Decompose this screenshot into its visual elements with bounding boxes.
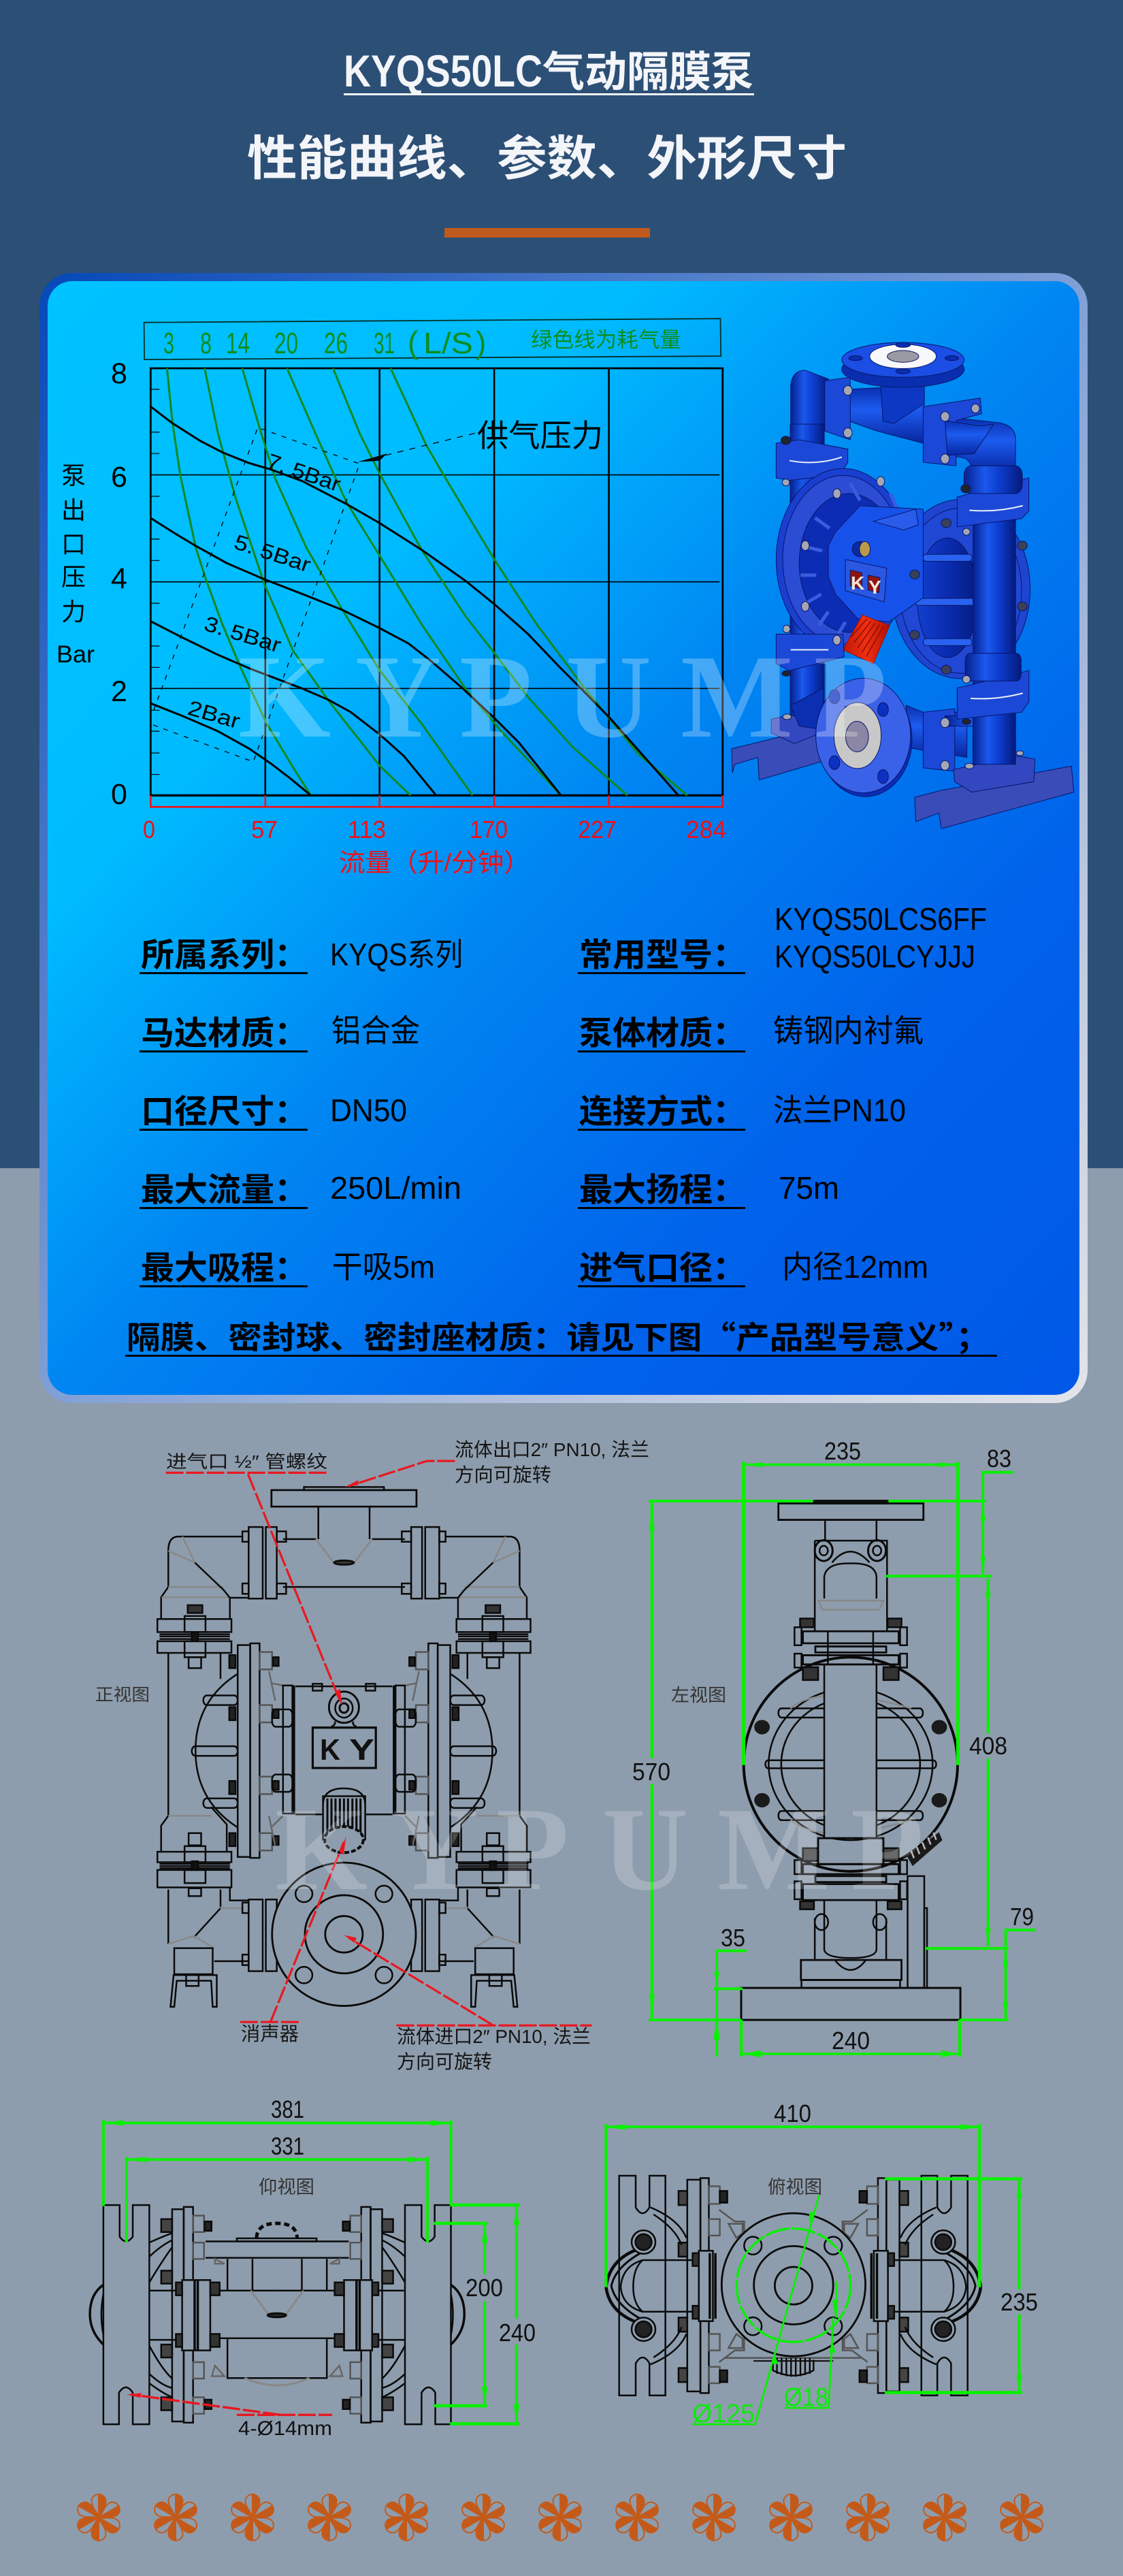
left view: dimension labels: 83 — [987, 1445, 1011, 1472]
front view: labels: 进气口 ½″ 管螺纹 — [166, 1451, 327, 1472]
chart: air consumption legend: 31 — [374, 327, 395, 360]
left view: dimension labels: 35 — [721, 1924, 745, 1952]
decorative flower row — [75, 2494, 1045, 2541]
chart: y axis numbers: 4 — [111, 562, 127, 595]
left view: dimension labels: 240 — [832, 2027, 870, 2055]
chart: air consumption legend: 绿色线为耗气量 — [531, 328, 681, 352]
chart: y axis title: 出 — [61, 496, 86, 524]
parameter: max suction: 干吸5m — [332, 1249, 435, 1285]
left view: dimension labels: 79 — [1010, 1903, 1034, 1931]
left view: dimension labels: 408 — [969, 1732, 1007, 1760]
chart plot lines — [144, 319, 723, 807]
chart: x axis numbers: 227 — [578, 816, 617, 843]
parameter: max head: 75m — [779, 1170, 839, 1206]
chart: x axis numbers: 170 — [470, 816, 508, 843]
front view: labels — [95, 1439, 649, 2072]
chart: y axis title: 泵 — [61, 462, 86, 489]
title — [344, 46, 754, 96]
parameter: max flow: 250L/min — [330, 1170, 461, 1206]
parameter: motor material — [140, 1006, 420, 1054]
material note: 隔膜、密封球、密封座材质 ：请见下图“产品型号意义” ； — [127, 1313, 990, 1358]
chart: air consumption legend: 3 — [163, 327, 174, 360]
chart: air consumption legend: 8 — [200, 327, 212, 360]
parameter: max head: 最大扬程： — [579, 1163, 746, 1210]
parameter: air inlet — [578, 1241, 928, 1289]
parameter: air inlet: 内径12mm — [782, 1249, 928, 1285]
front view: labels: 消声器 — [241, 2023, 299, 2044]
top view: labels: Ø18 — [784, 2383, 828, 2412]
title: 气动隔膜泵 — [542, 49, 753, 96]
parameter: body material — [578, 1006, 924, 1054]
left view: caption: 左视图 — [671, 1685, 726, 1705]
bottom view: labels — [238, 2095, 536, 2440]
parameter: body material: 泵体材质： — [579, 1006, 746, 1054]
front view: KY plate letters — [320, 1733, 374, 1767]
chart: air consumption legend: 20 — [274, 327, 298, 360]
top view: labels: 俯视图 — [768, 2177, 822, 2197]
top view: labels: Ø125 — [692, 2400, 755, 2428]
front view: labels: 流体进口2″ PN10, 法兰 — [397, 2026, 591, 2047]
parameter: common models: 常用型号： — [579, 928, 746, 976]
drawing: bottom view — [90, 2095, 536, 2440]
parameter: max head — [578, 1163, 839, 1210]
chart: x axis title: 流量（升/分钟） — [339, 849, 530, 877]
chart: x axis numbers: 284 — [686, 816, 726, 843]
chart: y axis title: 压 — [61, 563, 86, 591]
parameter: max flow — [140, 1163, 461, 1210]
chart: y axis title: Bar — [56, 641, 95, 668]
parameter: motor material: 马达材质： — [141, 1006, 308, 1054]
title: KYQS50LC — [344, 46, 542, 96]
chart: air consumption legend — [163, 325, 681, 360]
chart: y axis numbers: 0 — [111, 778, 127, 811]
chart: air consumption legend: 14 — [226, 327, 250, 360]
parameter: body material: 铸钢内衬氟 — [773, 1013, 924, 1048]
chart: supply pressure label: 供气压力 — [477, 418, 603, 453]
bottom view: labels: 381 — [271, 2095, 304, 2123]
parameter: max suction — [140, 1241, 435, 1289]
front view: labels: 方向可旋转 — [397, 2051, 492, 2072]
parameter: air inlet: 进气口径： — [579, 1241, 746, 1289]
top view: labels: 235 — [1000, 2288, 1038, 2316]
drawing: top view — [606, 2099, 1038, 2428]
chart: y axis title: 力 — [61, 598, 86, 626]
front view: labels: 流体出口2″ PN10, 法兰 — [455, 1439, 649, 1460]
accent bar — [444, 228, 650, 238]
subtitle: 性能曲线、参数、外形尺寸 — [247, 132, 847, 185]
left view: lower dimensions — [713, 2020, 960, 2057]
parameter: connection — [578, 1084, 906, 1132]
parameter: common models: KYQS50LCS6FF — [775, 901, 987, 937]
front view: KY plate letters: K — [320, 1733, 340, 1767]
chart: y axis title — [56, 462, 95, 668]
chart: y axis numbers: 6 — [111, 461, 127, 494]
front view: red leader lines — [166, 1461, 592, 2025]
pump plate letters: K — [851, 573, 864, 594]
chart: y axis numbers: 2 — [111, 675, 127, 708]
parameter: connection: 连接方式： — [579, 1084, 746, 1132]
pump plate letters: Y — [868, 577, 881, 598]
parameter: common models — [578, 901, 987, 976]
parameter: common models: KYQS50LCYJJJ — [775, 939, 975, 974]
parameter table — [125, 901, 997, 1358]
pump 3D illustration — [732, 342, 1074, 828]
parameter: max suction: 最大吸程： — [141, 1241, 308, 1289]
chart: curve labels — [185, 449, 344, 733]
pump plate letters — [851, 573, 881, 598]
parameter: port size: DN50 — [330, 1093, 407, 1128]
left view: dimension labels — [632, 1437, 1034, 2055]
panel: performance and parameters — [39, 273, 1088, 1403]
background: grey lower band — [0, 1168, 1123, 2576]
front view: KY plate letters: Y — [349, 1733, 374, 1767]
parameter: motor material: 铝合金 — [331, 1013, 420, 1048]
top view: labels — [692, 2099, 1038, 2428]
chart: curve labels: 2Bar — [185, 696, 243, 733]
background: dark top band — [0, 0, 1123, 1168]
chart: air consumption legend: ( — [408, 325, 419, 360]
bottom view: labels: 331 — [271, 2132, 304, 2160]
watermark: KYPUMP on panel: KYPUMP — [238, 630, 887, 762]
chart: curve labels: 7. 5Bar — [264, 449, 344, 496]
chart: y axis numbers — [111, 357, 127, 811]
bottom view: labels: 4-Ø14mm — [238, 2417, 332, 2440]
left view: dimension labels: 570 — [632, 1758, 670, 1786]
chart: curve labels: 5. 5Bar — [231, 530, 314, 577]
chart: x axis numbers: 113 — [348, 816, 386, 843]
parameter: port size: 口径尺寸： — [141, 1084, 308, 1132]
bottom view: labels: 240 — [499, 2319, 536, 2347]
chart: x axis numbers: 57 — [251, 816, 278, 843]
chart: air consumption legend: ) — [476, 325, 486, 360]
chart: air consumption legend: 26 — [324, 327, 348, 360]
parameter: series: 所属系列： — [141, 928, 308, 976]
parameter: max flow: 最大流量： — [141, 1163, 308, 1210]
front view: labels: 方向可旋转 — [455, 1464, 551, 1485]
chart: x axis numbers — [143, 816, 726, 843]
chart: curve labels: 3. 5Bar — [201, 611, 284, 658]
bottom view: labels: 仰视图 — [259, 2177, 314, 2197]
chart: y axis title: 口 — [61, 530, 86, 558]
parameter: port size — [140, 1084, 407, 1132]
top view: labels: 410 — [774, 2099, 811, 2127]
bottom view: labels: 200 — [466, 2274, 503, 2302]
drawing: front view — [95, 1439, 649, 2072]
front view: labels: 正视图 — [95, 1686, 150, 1705]
parameter: connection: 法兰PN10 — [773, 1093, 906, 1128]
watermark: KYPUMP on drawings: KYPUMP — [275, 1783, 924, 1915]
chart: x axis numbers: 0 — [143, 816, 155, 843]
parameter: series: KYQS系列 — [330, 937, 463, 972]
chart: performance curves — [56, 319, 726, 877]
parameter: series — [140, 928, 463, 976]
chart: air consumption legend: L/S — [423, 327, 473, 360]
chart: y axis numbers: 8 — [111, 357, 127, 390]
left view: dimension labels: 235 — [824, 1437, 861, 1465]
drawing: left view — [632, 1437, 1035, 2057]
